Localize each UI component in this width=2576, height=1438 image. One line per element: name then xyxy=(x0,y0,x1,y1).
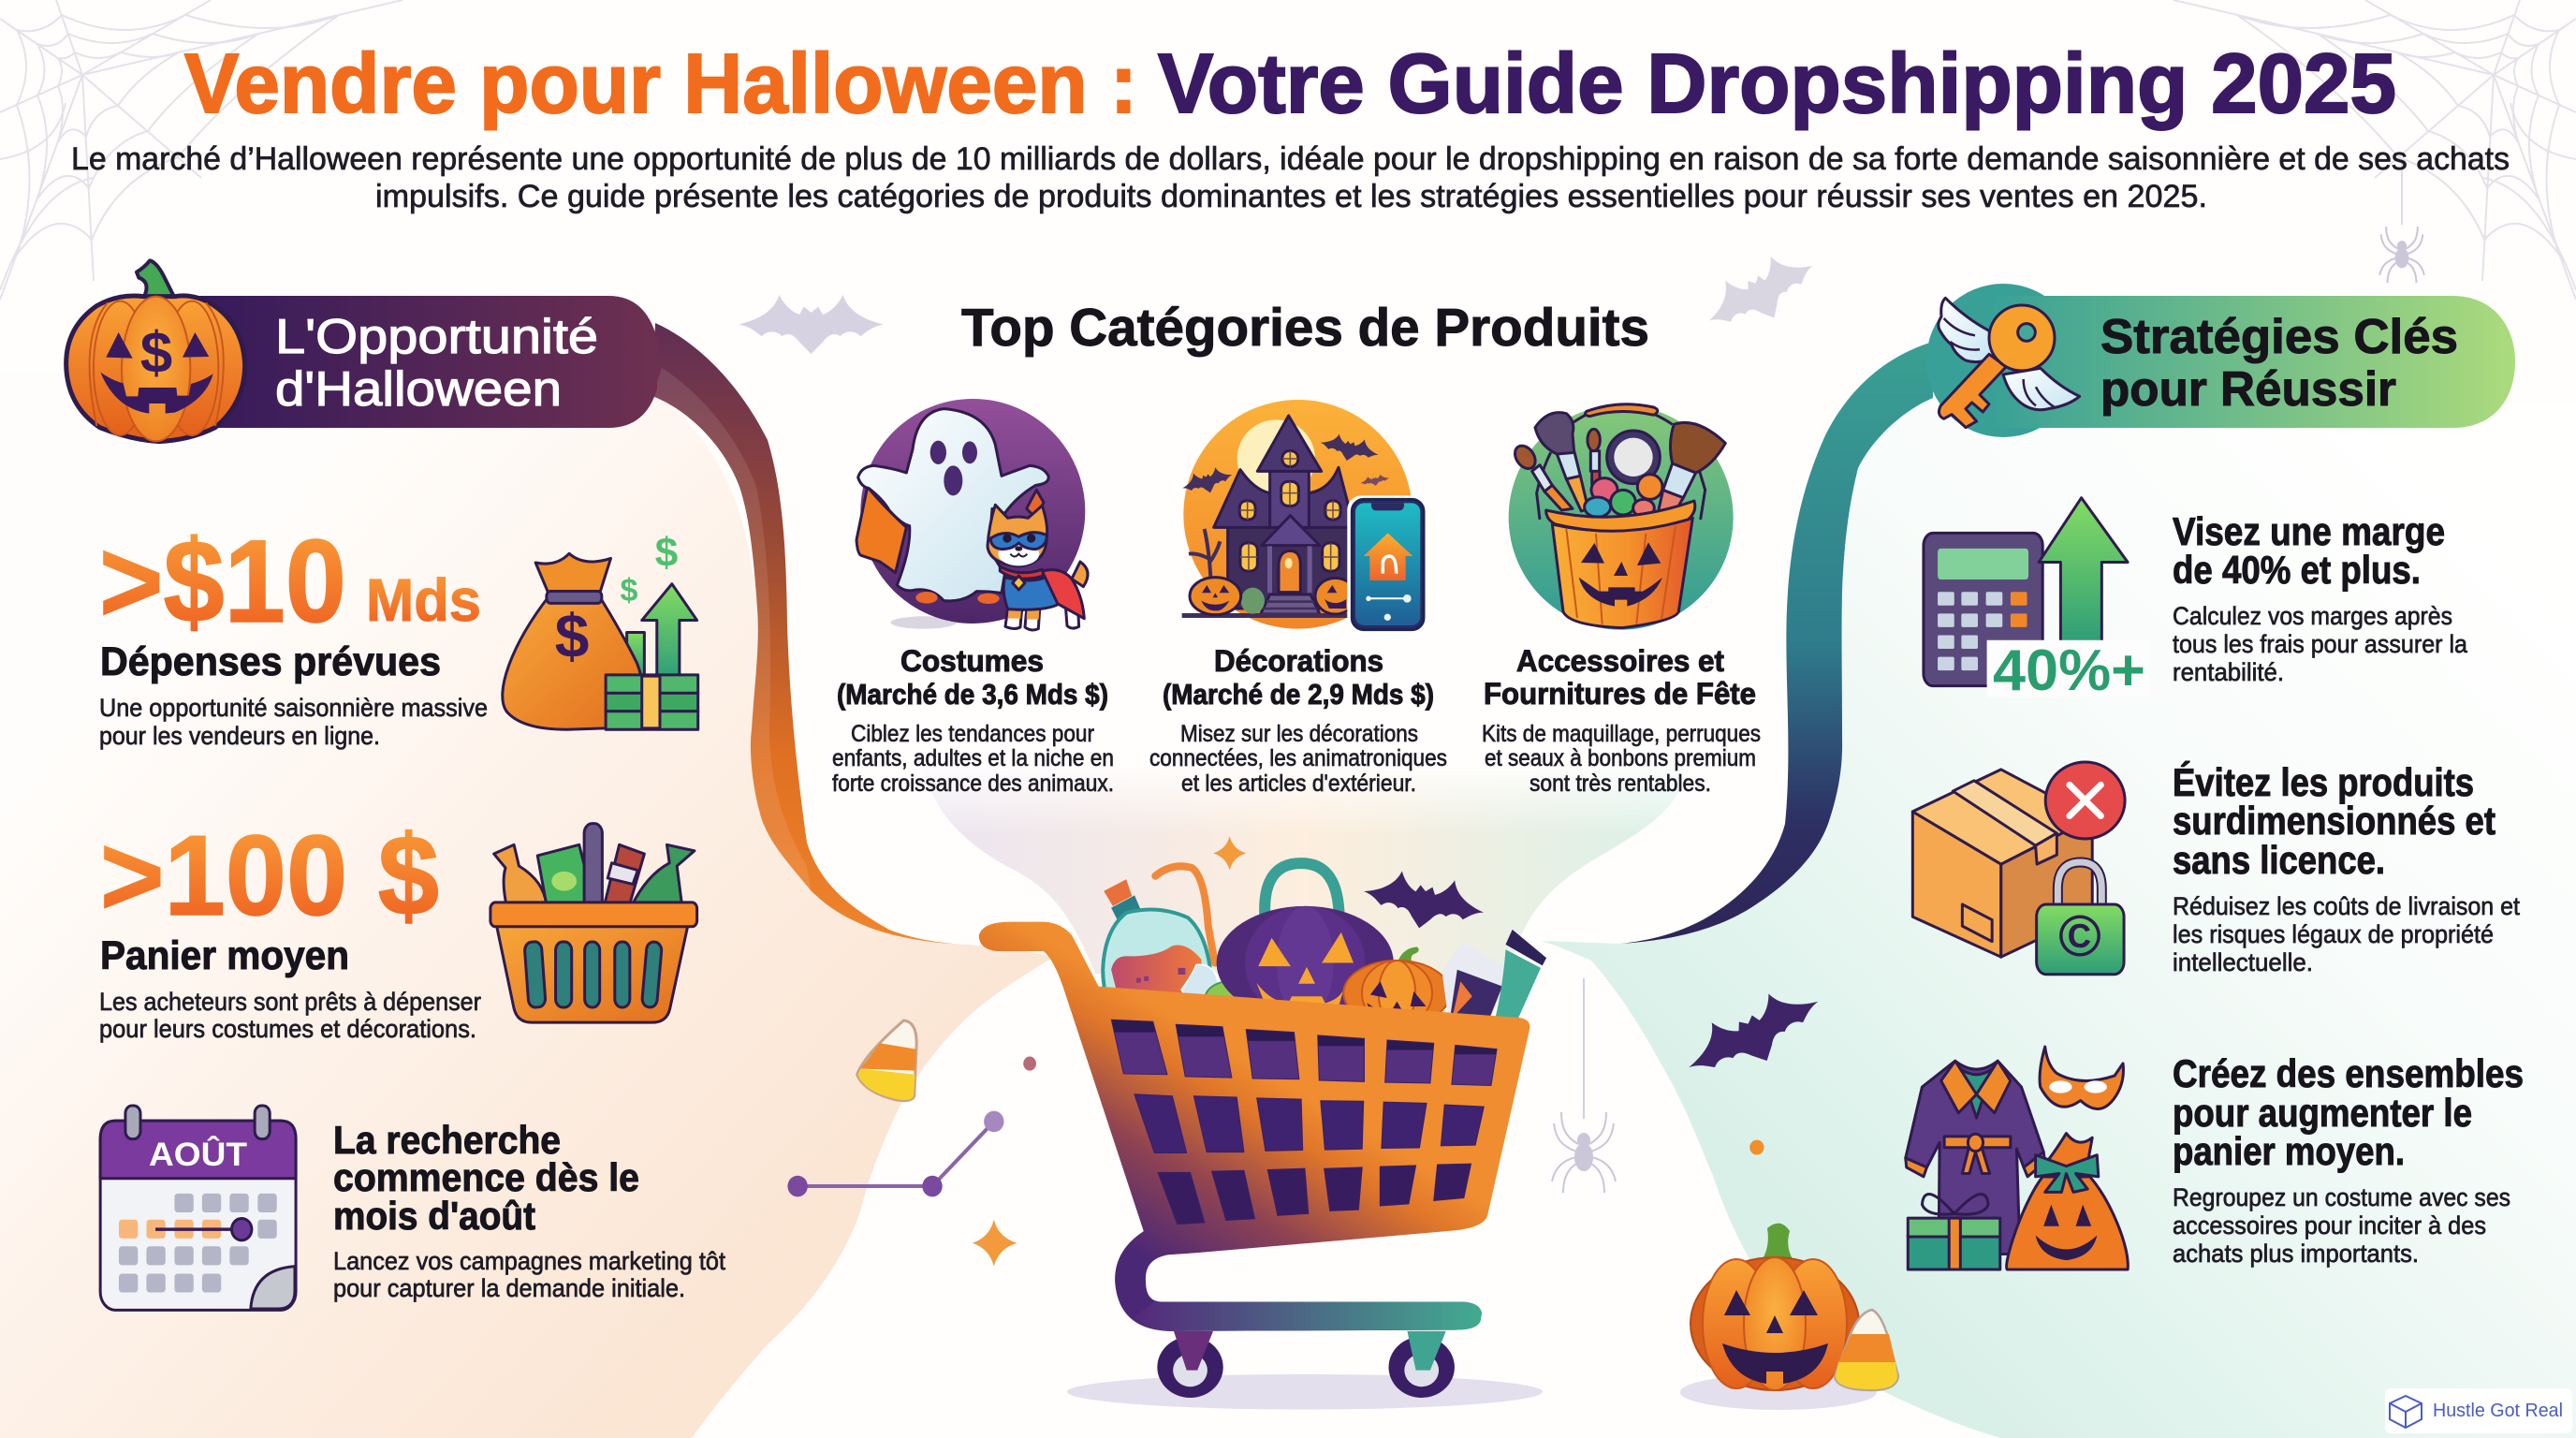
subtitle xyxy=(71,141,2510,214)
cart basket holes xyxy=(1111,1020,1497,1225)
heading band: Stratégies Clés pour Réussir: pour Réussir xyxy=(2100,362,2396,417)
ribbon: left connector to cart xyxy=(652,323,969,945)
icon: ghost and dog costume xyxy=(856,399,1088,630)
text: margin: de 40% et plus. xyxy=(2173,548,2421,592)
text: margin: Visez une marge xyxy=(2173,509,2445,553)
cart base bar xyxy=(1134,1301,1482,1331)
icon: winged key xyxy=(1939,298,2080,428)
dark bat right xyxy=(1676,976,1832,1093)
cart body xyxy=(979,922,1530,1331)
illustration: shopping cart full of Halloween products xyxy=(979,836,1546,1410)
text: costumes: Ciblez les tendances pour xyxy=(851,721,1094,747)
icon: August calendar: AOÛT xyxy=(149,1136,247,1173)
stat: >$10 Mds: >$10 xyxy=(99,517,346,647)
text: bundles: pour augmenter le xyxy=(2173,1091,2472,1135)
heading: top categories: Top Catégories de Produits xyxy=(961,298,1649,358)
text: bundles: Regroupez un costume avec ses xyxy=(2173,1183,2510,1211)
hanging spider top right xyxy=(2379,159,2424,283)
icon: box with cross and lock xyxy=(1912,762,2125,975)
text: accessories xyxy=(1482,644,1761,797)
text: decorations: (Marché de 2,9 Mds $) xyxy=(1163,678,1434,711)
text: accessories: Accessoires et xyxy=(1516,644,1724,678)
text: bundles: accessoires pour inciter à des xyxy=(2173,1211,2486,1240)
text: avoid oversized: sans licence. xyxy=(2173,838,2385,882)
text: search starts in August: mois d'août xyxy=(333,1194,535,1238)
text: decorations: et les articles d'extérieur. xyxy=(1181,770,1416,797)
stat: >$10 Mds: Une opportunité saisonnière massive xyxy=(99,694,488,722)
stat: >$10 Mds: Dépenses prévues xyxy=(100,639,441,684)
text: avoid oversized: surdimensionnés et xyxy=(2173,799,2496,843)
icon: shopping basket xyxy=(490,824,697,1022)
decorations around cart xyxy=(787,976,1898,1410)
stat: >100 $: Panier moyen xyxy=(100,933,349,978)
text: costumes: Costumes xyxy=(900,644,1044,678)
text: accessories: et seaux à bonbons premium xyxy=(1485,745,1756,771)
cart shadow xyxy=(1067,1374,1543,1410)
cart wheels xyxy=(1157,1331,1455,1398)
stat: >100 $: >100 $ xyxy=(100,812,439,939)
icon: calculator with up arrow xyxy=(1924,498,2150,703)
heading band: L'Opportunité d'Halloween: L'Opportunité xyxy=(275,310,598,364)
stat: >$10 Mds: pour les vendeurs en ligne. xyxy=(99,722,380,750)
sparkle xyxy=(973,1220,1017,1267)
icon: costume bundle xyxy=(1906,1047,2128,1269)
text: decorations: Misez sur les décorations xyxy=(1180,721,1418,747)
heading band: L'Opportunité d'Halloween xyxy=(187,296,657,428)
background: fan fade to white xyxy=(917,763,1694,833)
ghost bat left xyxy=(739,295,884,354)
watermark: Hustle Got Real: Hustle Got Real xyxy=(2433,1401,2563,1421)
panel: opportunity xyxy=(66,260,725,1310)
text: decorations: connectées, les animatroniques xyxy=(1149,745,1447,771)
watermark: Hustle Got Real xyxy=(2385,1388,2572,1433)
ribbon: right connector to cart xyxy=(1620,342,1933,944)
icon: money bag with arrow: $ xyxy=(621,573,638,609)
text: accessories: sont très rentables. xyxy=(1530,770,1711,797)
text: costumes xyxy=(832,644,1114,797)
sparkle above cart xyxy=(1213,836,1246,870)
network nodes xyxy=(787,1111,1004,1196)
text: margin: rentabilité. xyxy=(2173,658,2284,686)
background: left peach zone xyxy=(0,374,1054,1438)
text: margin: tous les frais pour assurer la xyxy=(2173,630,2468,658)
text: costumes: forte croissance des animaux. xyxy=(832,770,1114,797)
text: search starts in August: La recherche xyxy=(333,1118,561,1162)
text: bundles: achats plus importants. xyxy=(2173,1240,2419,1268)
text: avoid oversized: Réduisez les coûts de livraison et xyxy=(2173,892,2520,920)
subtitle: impulsifs. Ce guide présente les catégories de produits dominantes et les stratégies essentielles pour réussir ses ventes en 2025. xyxy=(375,179,2207,214)
icon: haunted house with phone xyxy=(1179,400,1426,633)
stat: >100 $: Les acheteurs sont prêts à dépenser xyxy=(99,988,481,1016)
text: costumes: (Marché de 3,6 Mds $) xyxy=(837,678,1108,711)
icon: dollar pumpkin: $ xyxy=(140,321,172,386)
heading band: L'Opportunité d'Halloween: d'Halloween xyxy=(275,362,562,417)
text: accessories: Kits de maquillage, perruques xyxy=(1482,721,1761,747)
icon: money bag with arrow xyxy=(503,530,698,729)
text: search starts in August: Lancez vos campagnes marketing tôt xyxy=(333,1247,725,1275)
icon: calculator with up arrow: 40%+ xyxy=(1993,638,2145,703)
text: search starts in August: commence dès le xyxy=(333,1155,639,1199)
title xyxy=(184,37,2396,131)
spider web top right xyxy=(2174,0,2576,300)
subtitle: Le marché d’Halloween représente une opportunité de plus de 10 milliards de dollars, idéale pour le dropshipping en raison de sa forte demande saisonnière et de ses achats xyxy=(71,141,2510,177)
dot xyxy=(1023,1057,1036,1071)
title: Votre Guide Dropshipping 2025 xyxy=(1158,37,2396,131)
stat: >$10 Mds xyxy=(99,517,488,750)
heading band: Stratégies Clés pour Réussir: Stratégies Clés xyxy=(2100,310,2458,364)
pumpkin bottom right xyxy=(1680,1224,1877,1410)
text: costumes: enfants, adultes et la niche en xyxy=(832,745,1114,771)
text: avoid oversized xyxy=(2173,760,2520,976)
text: search starts in August xyxy=(333,1118,725,1302)
text: decorations xyxy=(1149,644,1447,797)
background: right mint zone xyxy=(1541,398,2576,1438)
text: bundles xyxy=(2173,1051,2524,1268)
cart contents xyxy=(1103,863,1546,1032)
text: accessories: Fournitures de Fête xyxy=(1484,677,1756,711)
icon: dollar pumpkin xyxy=(66,260,245,442)
text: bundles: panier moyen. xyxy=(2173,1129,2405,1173)
stat: >100 $ xyxy=(99,812,481,1043)
ghost bat right xyxy=(1696,241,1826,345)
text: avoid oversized: les risques légaux de propriété xyxy=(2173,920,2494,948)
text: margin: Calculez vos marges après xyxy=(2173,602,2452,630)
stat: >100 $: pour leurs costumes et décorations. xyxy=(99,1015,476,1043)
stat: >$10 Mds: Mds xyxy=(366,566,481,634)
icon: money bag with arrow: $ xyxy=(555,601,589,670)
text: margin xyxy=(2173,509,2468,686)
candy corn right xyxy=(1835,1310,1898,1390)
icon: makeup bucket xyxy=(1509,404,1734,630)
candy corn left xyxy=(857,1020,916,1101)
background: centre fan above the cart xyxy=(922,768,1690,974)
heading band: Stratégies Clés pour Réussir xyxy=(1926,284,2515,437)
text: avoid oversized: Évitez les produits xyxy=(2173,760,2474,804)
icon: August calendar xyxy=(100,1106,296,1310)
bat above cart xyxy=(1359,865,1488,939)
orange dot xyxy=(1749,1140,1764,1155)
title: Vendre pour Halloween : xyxy=(184,37,1137,131)
text: decorations: Décorations xyxy=(1214,644,1383,678)
hanging spider centre xyxy=(1552,978,1616,1193)
icon: box with cross and lock: © xyxy=(2058,904,2101,969)
text: bundles: Créez des ensembles xyxy=(2173,1051,2524,1095)
panel: top product categories xyxy=(832,298,1761,797)
icon: money bag with arrow: $ xyxy=(655,530,678,576)
text: avoid oversized: intellectuelle. xyxy=(2173,948,2313,976)
panel: key strategies xyxy=(1906,284,2524,1269)
spider web top left xyxy=(0,0,402,300)
text: search starts in August: pour capturer la demande initiale. xyxy=(333,1274,685,1302)
